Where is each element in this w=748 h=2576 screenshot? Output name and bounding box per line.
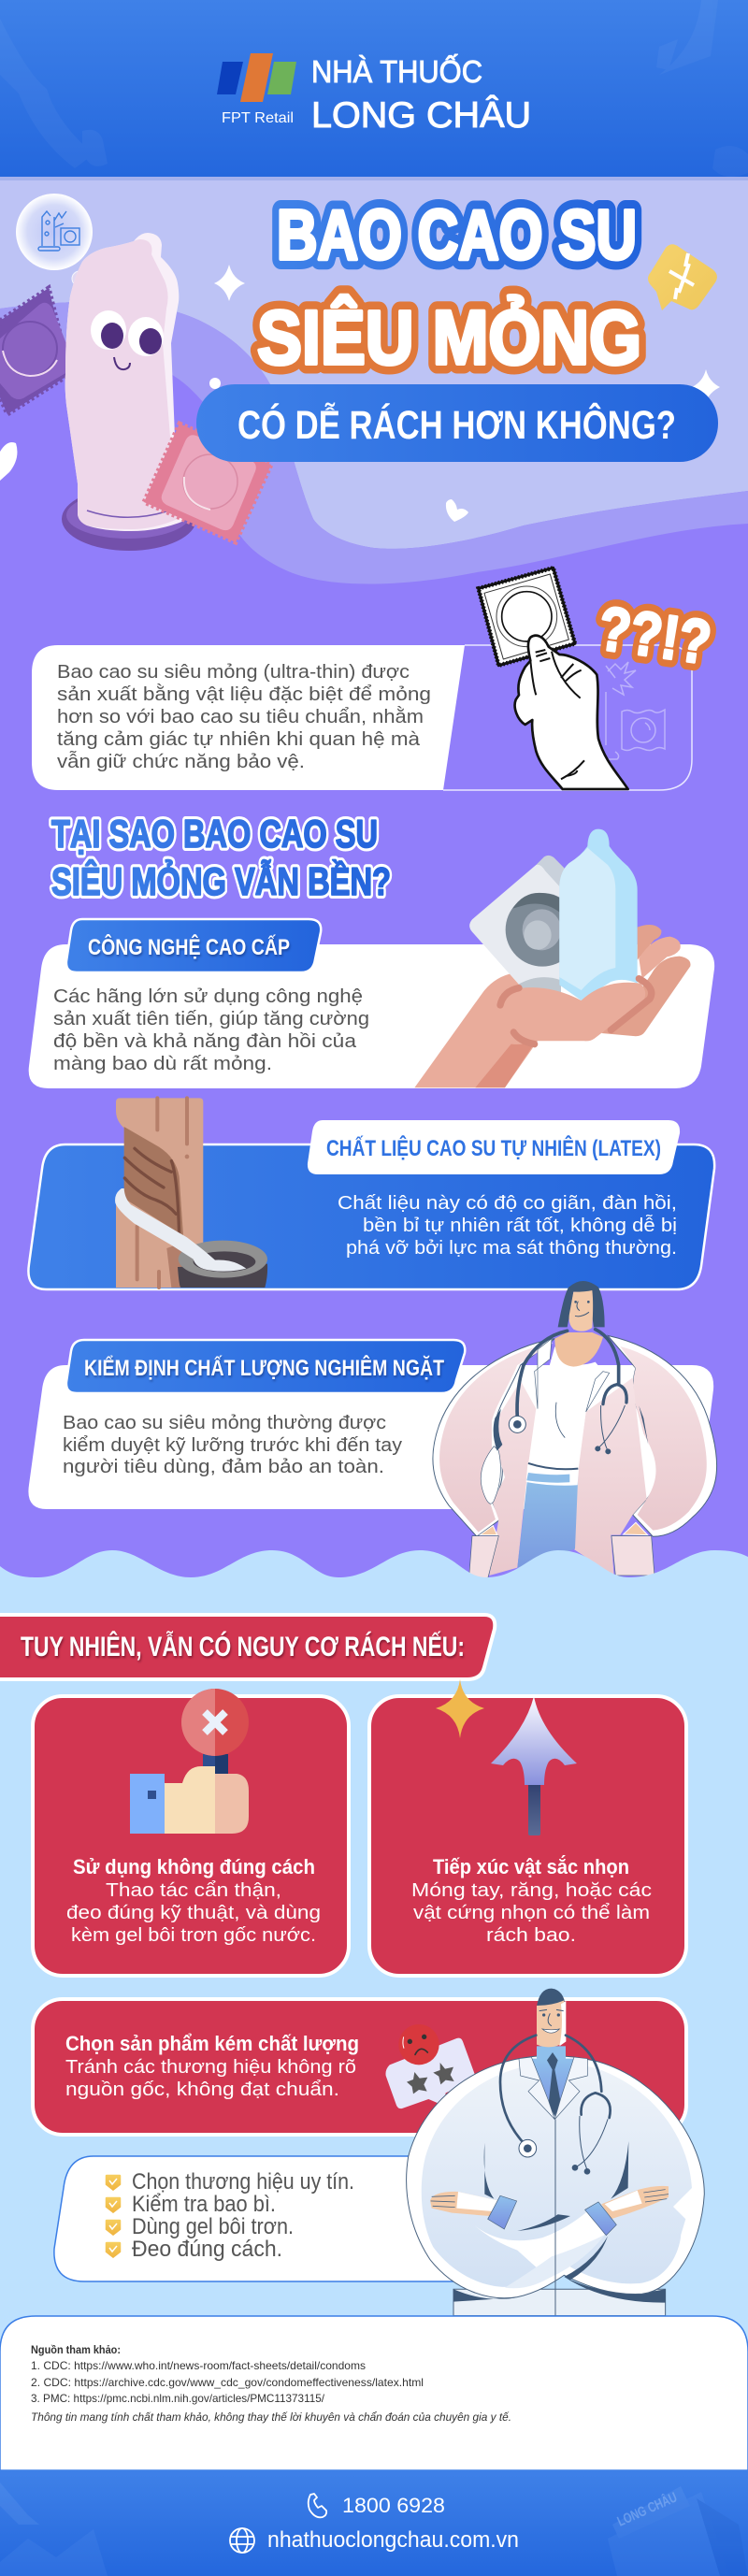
badge [66, 1340, 465, 1393]
tips text [132, 2169, 354, 2262]
intro text: tăng cảm giác tự nhiên khi quan hệ mà [57, 729, 421, 750]
body text: màng bao dù rất mỏng. [53, 1054, 272, 1074]
icon: globe [230, 2528, 254, 2553]
text [411, 1855, 652, 1946]
title line 1: BAO CAO SU [277, 195, 637, 274]
illustration: hand holding packet [479, 568, 628, 789]
faint condom icons [606, 662, 665, 759]
text: rách bao. [486, 1925, 576, 1946]
panel: references: Thông tin mang tính chất tham khảo, không thay thế lời khuyên và chẩn đoán của chuyên gia y tế. [31, 2411, 511, 2424]
intro text [57, 662, 431, 772]
footer band [0, 2470, 748, 2576]
body text [63, 1413, 402, 1477]
phone number: 1800 6928 [342, 2494, 445, 2517]
icon: bubble with condom line icon [16, 194, 93, 286]
body text: người tiêu dùng, đảm bảo an toàn. [63, 1457, 384, 1477]
icon: thumb with cross [130, 1689, 249, 1834]
title line 2: SIÊU MỎNG [257, 295, 641, 381]
panel: references [0, 2316, 748, 2470]
question marks: ??!? [595, 593, 715, 677]
eyes and smile [91, 310, 164, 369]
panel: references: Nguồn tham khảo: [31, 2343, 121, 2356]
illustration: condom character [62, 233, 196, 551]
panel: intro [32, 645, 692, 790]
panel: tips [54, 2156, 486, 2281]
icon: bad review bubble [386, 2024, 476, 2108]
header band [0, 0, 748, 180]
panel: poor quality products: Chọn sản phẩm kém chất lượng [65, 2032, 359, 2055]
panel: poor quality products: Tránh các thương hiệu không rõ [65, 2057, 356, 2078]
panel: poor quality products: nguồn gốc, không đạt chuẩn. [65, 2080, 339, 2100]
body text: độ bền và khả năng đàn hồi của [53, 1031, 357, 1052]
panel: improper use [33, 1689, 349, 1976]
badge [66, 919, 321, 972]
light blue wave background [0, 1550, 748, 2576]
heading: why still durable: SIÊU MỎNG VẪN BỀN? [51, 858, 391, 903]
illustration: pink condom packet [144, 424, 271, 542]
illustration: purple condom packet [0, 288, 70, 414]
body text: bền bỉ tự nhiên rất tốt, không dễ bị [363, 1215, 677, 1236]
text: kèm gel bôi trơn gốc nước. [71, 1925, 316, 1946]
white coat gaps [481, 1446, 500, 1504]
body text: Bao cao su siêu mỏng thường được [63, 1413, 386, 1433]
badge [308, 1120, 680, 1174]
text: Thao tác cẩn thận, [106, 1880, 281, 1901]
question marks: ??!? [595, 593, 715, 677]
tips text: Kiểm tra bao bì. [132, 2192, 276, 2217]
badge: CÔNG NGHỆ CAO CẤP [88, 934, 290, 960]
title line 1: BAO CAO SU [277, 195, 637, 274]
badge: CHẤT LIỆU CAO SU TỰ NHIÊN (LATEX) [326, 1135, 661, 1161]
body text [53, 986, 369, 1074]
illustration: female doctor [433, 1281, 717, 1578]
illustration: male doctor [407, 1989, 704, 2316]
badge: KIỂM ĐỊNH CHẤT LƯỢNG NGHIÊM NGẶT [84, 1355, 444, 1381]
panel: references: 2. CDC: https://archive.cdc.gov/www_cdc_gov/condomeffectiveness/latex.html [31, 2376, 424, 2389]
body text: phá vỡ bởi lực ma sát thông thường. [346, 1238, 677, 1259]
icon: yellow tag with compress arrows [648, 244, 717, 310]
website: nhathuoclongchau.com.vn [267, 2527, 519, 2553]
text: vật cứng nhọn có thể làm [413, 1903, 650, 1923]
panel: references: 1. CDC: https://www.who.int/news-room/fact-sheets/detail/condoms [31, 2359, 366, 2372]
header watermark [0, 0, 748, 177]
title pill [196, 384, 718, 462]
body text: Chất liệu này có độ co giãn, đàn hồi, [338, 1193, 677, 1214]
heading: why still durable: TẠI SAO BAO CAO SU [51, 812, 378, 856]
banner: risk heading: TUY NHIÊN, VẪN CÓ NGUY CƠ RÁCH NẾU: [21, 1631, 465, 1662]
text [66, 1855, 321, 1946]
text: Móng tay, răng, hoặc các [411, 1880, 652, 1901]
logo text: Long Châu: LONG CHÂU [311, 95, 531, 136]
body text: kiểm duyệt kỹ lưỡng trước khi đến tay [63, 1435, 402, 1456]
body text: sản xuất tiên tiến, giúp tăng cường [53, 1009, 369, 1029]
panel: references: 3. PMC: https://pmc.ncbi.nlm.nih.gov/articles/PMC11373115/ [31, 2392, 325, 2405]
text: Sử dụng không đúng cách [73, 1855, 315, 1878]
icons: yellow checks [105, 2174, 122, 2259]
logo text: FPT Retail: FPT Retail [222, 110, 294, 126]
purple background [0, 168, 748, 1590]
heading: why still durable [51, 812, 391, 903]
panel: sharp objects [369, 1679, 686, 1976]
panel: advanced technology [29, 919, 714, 1088]
banner: risk heading [0, 1615, 495, 1679]
title line 2: SIÊU MỎNG [257, 295, 641, 381]
icon: gold star [436, 1679, 484, 1738]
text: đeo đúng kỹ thuật, và dùng [66, 1903, 321, 1923]
panel: poor quality products [33, 1999, 686, 2135]
illustration: rubber tree tapping [115, 1098, 267, 1288]
panel: quality testing [28, 1340, 713, 1509]
text: Tiếp xúc vật sắc nhọn [433, 1855, 629, 1878]
logo: FPT squares [217, 53, 296, 102]
icon: sharp spear [491, 1696, 577, 1835]
tips text: Dùng gel bôi trơn. [132, 2214, 294, 2239]
decorations: sparkles and hearts [0, 265, 720, 522]
logo text: Nhà Thuốc: NHÀ THUỐC [311, 53, 482, 89]
tips text: Chọn thương hiệu uy tín. [132, 2169, 354, 2195]
intro text: vẫn giữ chức năng bảo vệ. [57, 751, 305, 772]
panel: natural latex [28, 1120, 714, 1289]
intro text: sản xuất bằng vật liệu đặc biệt để mỏng [57, 684, 431, 705]
intro text: Bao cao su siêu mỏng (ultra-thin) được [57, 662, 410, 683]
heading: why still durable: TẠI SAO BAO CAO SU [51, 812, 378, 856]
heading: why still durable: SIÊU MỎNG VẪN BỀN? [51, 858, 391, 903]
icon: phone [309, 2494, 326, 2517]
watermark: store [0, 2482, 748, 2576]
body text: Các hãng lớn sử dụng công nghệ [53, 986, 363, 1007]
intro text: hơn so với bao cao su tiêu chuẩn, nhằm [57, 706, 424, 727]
illustration: hand holding condom [414, 829, 690, 1087]
body text [338, 1193, 677, 1259]
watermark store name: LONG CHÂU [614, 2489, 680, 2530]
hero background: lavender and mid purple waves [0, 177, 748, 583]
tips text: Đeo đúng cách. [132, 2237, 282, 2262]
